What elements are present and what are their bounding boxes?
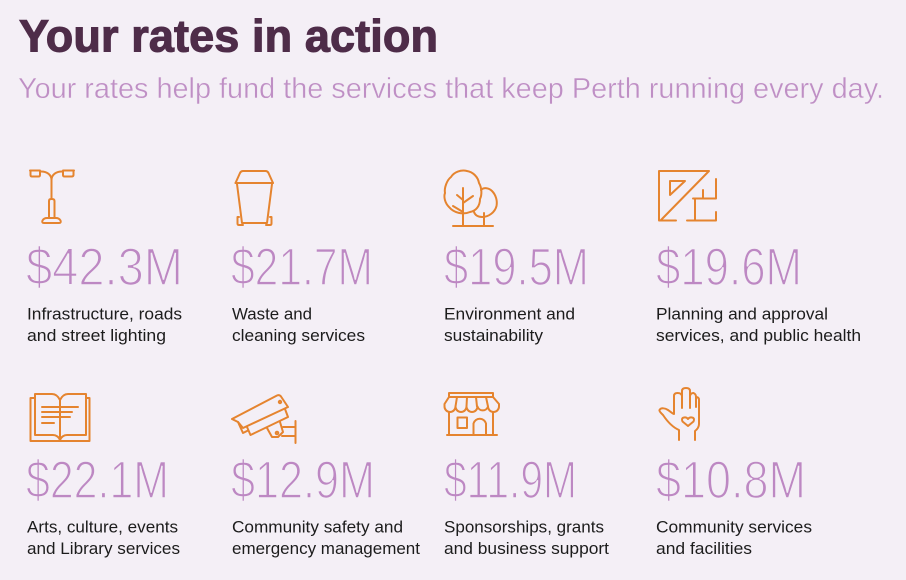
panel: planning [656, 171, 861, 345]
amount: $12.9M [231, 451, 375, 510]
subtitle: Your rates help fund the services that keep Perth running every day. [18, 73, 884, 105]
amount: $19.6M [656, 238, 802, 297]
label: cleaning services [232, 326, 365, 345]
label: and business support [444, 539, 609, 558]
icon: trees [444, 171, 497, 226]
amount: $10.8M [656, 451, 806, 510]
label: Community services [656, 518, 812, 536]
label: and Library services [27, 539, 180, 558]
panel: environment [444, 171, 589, 345]
amount: $21.7M [231, 238, 373, 297]
panel: community [656, 388, 812, 558]
label: Planning and approval [656, 304, 828, 324]
amount: $22.1M [26, 451, 169, 510]
panel: sponsorships [444, 393, 609, 558]
panel: waste [231, 171, 373, 345]
label: Waste and [232, 304, 312, 324]
amount: $19.5M [444, 238, 589, 297]
icon: open book [30, 394, 90, 441]
icon: street lamp [30, 170, 74, 223]
amount: $11.9M [444, 451, 577, 510]
label: Community safety and [232, 518, 403, 536]
label: and facilities [656, 539, 752, 558]
label: Infrastructure, roads [27, 304, 182, 324]
title: Your rates in action [19, 10, 438, 62]
label: sustainability [444, 326, 544, 345]
panel: safety [231, 395, 420, 558]
label: emergency management [232, 539, 420, 558]
label: services, and public health [656, 326, 861, 345]
icon: set square and plan [659, 171, 716, 220]
label: Environment and [444, 304, 575, 324]
panel: arts [26, 394, 180, 558]
label: and street lighting [27, 326, 166, 345]
panel: infrastructure [26, 170, 183, 345]
icon: wheelie bin [236, 171, 273, 225]
icon: hand with heart [659, 388, 699, 440]
label: Arts, culture, events [27, 518, 178, 536]
amount: $42.3M [26, 238, 183, 297]
icon: shop front [444, 393, 499, 435]
icon: security camera [232, 395, 296, 443]
label: Sponsorships, grants [444, 518, 604, 536]
